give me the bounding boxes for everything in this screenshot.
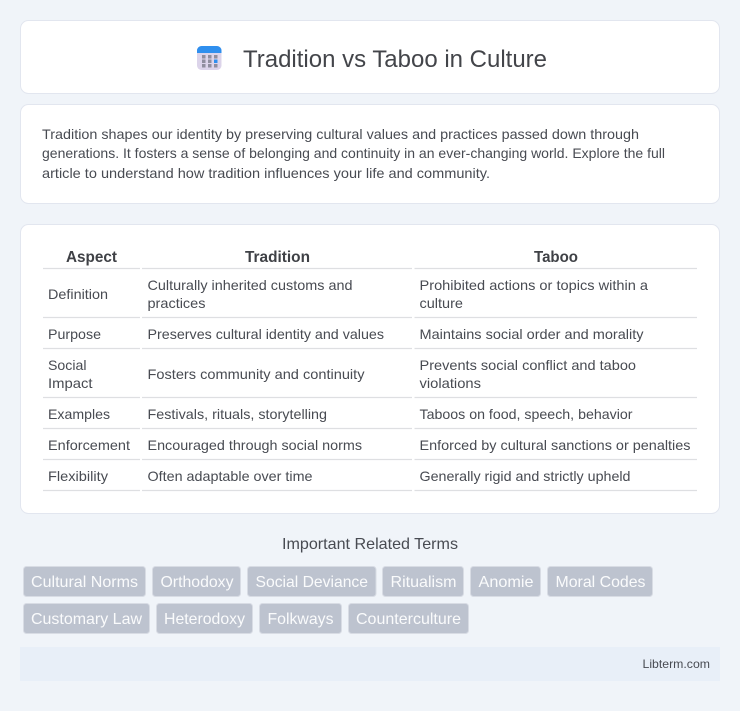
tag: customary law <box>24 604 150 634</box>
row: flexibility: Flexibility <box>48 468 108 484</box>
row: definition: culture <box>420 295 463 311</box>
row: definition: Prohibited actions or topics within a <box>420 277 648 293</box>
row: purpose: Maintains social order and morality <box>420 326 644 342</box>
row: social impact: violations <box>420 375 481 391</box>
row: enforcement: Enforcement <box>48 437 130 453</box>
intro text: Tradition shapes our identity by preserving cultural values and practices passed down through <box>42 126 639 142</box>
row: definition: Culturally inherited customs and <box>148 277 352 293</box>
tag: moral codes: Moral Codes <box>556 574 646 591</box>
row: flexibility: Generally rigid and strictly upheld <box>420 468 630 484</box>
tag: heterodoxy <box>156 604 252 634</box>
row: social impact: Prevents social conflict and taboo <box>420 357 636 373</box>
tag: heterodoxy: Heterodoxy <box>164 611 245 628</box>
tag: folkways: Folkways <box>268 611 334 628</box>
table header: Tradition <box>245 249 310 266</box>
intro text: generations. It fosters a sense of belonging and continuity in an ever-changing world. Explore the full <box>42 145 665 161</box>
tag: counterculture <box>348 604 468 634</box>
row: definition: Definition <box>48 286 108 302</box>
panel: introduction <box>20 104 720 204</box>
row: social impact <box>48 357 636 391</box>
intro text <box>42 126 665 181</box>
tag: ritualism: Ritualism <box>390 574 456 591</box>
tag: folkways <box>260 604 342 634</box>
row: social impact: Fosters community and continuity <box>148 366 364 382</box>
tag: anomie: Anomie <box>478 574 534 591</box>
table header: Aspect <box>66 249 118 266</box>
row: enforcement: Encouraged through social norms <box>148 437 362 453</box>
title: Tradition vs Taboo in Culture <box>243 46 547 73</box>
tag: cultural norms: Cultural Norms <box>31 574 138 591</box>
table header <box>66 249 578 266</box>
footer bar <box>20 647 720 681</box>
panel: comparison table <box>20 224 720 514</box>
tag: social deviance: Social Deviance <box>256 574 368 591</box>
header panel <box>20 20 720 94</box>
related terms heading: Important Related Terms <box>282 536 458 553</box>
row: social impact: Impact <box>48 375 93 391</box>
tag: cultural norms <box>24 566 146 596</box>
tag: social deviance <box>248 566 376 596</box>
related terms tags <box>24 566 652 634</box>
tag: ritualism <box>382 566 464 596</box>
intro text: article to understand how tradition influences your life and community. <box>42 165 490 181</box>
tag: orthodoxy <box>152 566 240 596</box>
row: definition <box>48 277 648 311</box>
row: purpose: Purpose <box>48 326 101 342</box>
row: flexibility <box>48 468 630 484</box>
tag: customary law: Customary Law <box>31 611 142 628</box>
row: examples: Examples <box>48 406 110 422</box>
row: enforcement <box>48 437 690 453</box>
row: purpose: Preserves cultural identity and values <box>148 326 384 342</box>
icon: calendar <box>197 46 222 70</box>
footer credit: Libterm.com <box>642 657 710 671</box>
row: examples: Festivals, rituals, storytelling <box>148 406 327 422</box>
tag: orthodoxy: Orthodoxy <box>160 574 234 591</box>
row: flexibility: Often adaptable over time <box>148 468 313 484</box>
row: examples <box>48 406 633 422</box>
row: examples: Taboos on food, speech, behavior <box>420 406 633 422</box>
table header: Taboo <box>534 249 578 266</box>
row: enforcement: Enforced by cultural sanctions or penalties <box>420 437 690 453</box>
row: definition: practices <box>148 295 206 311</box>
tag: moral codes <box>548 566 652 596</box>
row: purpose <box>48 326 644 342</box>
tag: counterculture: Counterculture <box>356 611 461 628</box>
row: social impact: Social <box>48 357 86 373</box>
tag: anomie <box>470 566 540 596</box>
